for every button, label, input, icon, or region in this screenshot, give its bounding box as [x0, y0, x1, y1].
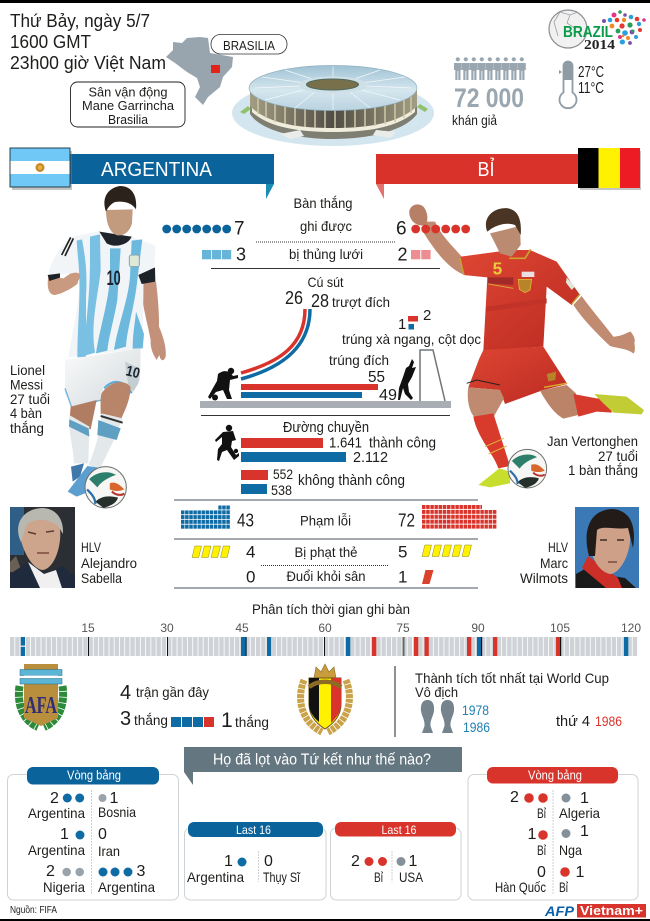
- shots chart: 55: [368, 369, 385, 386]
- shots chart: 1: [398, 316, 406, 333]
- cards rows: 1: [398, 568, 407, 586]
- passes chart: 552: [273, 467, 293, 482]
- goal timing timeline: 60: [318, 621, 332, 635]
- panel: Belgium group stage: 0: [537, 864, 546, 881]
- panel: Belgium group stage: 1: [580, 823, 589, 840]
- goals scored and conceded: ghi được: [300, 219, 352, 234]
- panel: Belgium group stage: 1: [528, 826, 536, 843]
- panel: Argentina group stage: Argentina: [98, 879, 155, 895]
- panel: Argentina group stage: 1: [60, 826, 69, 843]
- stadium name box: Sân vận động: [88, 84, 168, 100]
- goal timing timeline: [10, 601, 641, 656]
- Vertonghen caption: 27 tuổi: [598, 448, 638, 464]
- panel: Argentina group stage: 1: [110, 790, 118, 807]
- cards rows: 0: [246, 568, 255, 586]
- crest: Argentine Football Association: [19, 664, 63, 727]
- goals scored and conceded: 7: [234, 218, 245, 240]
- stadium illustration: [232, 66, 434, 146]
- panel: Belgium group stage: 2: [510, 789, 519, 806]
- flag of Belgium: [578, 148, 641, 190]
- recent matches: thắng: [235, 714, 269, 730]
- Vertonghen caption: Jan Vertonghen: [547, 433, 638, 449]
- panel: Argentina last 16: Last 16: [236, 823, 271, 837]
- recent matches: [120, 682, 269, 732]
- player photo: Lionel Messi: 10: [107, 266, 121, 290]
- panel: Belgium group stage: 1: [580, 790, 589, 807]
- source note: Nguồn: FIFA: [10, 904, 57, 916]
- panel: Belgium group stage: Bỉ: [559, 879, 569, 895]
- Vertonghen caption: [547, 433, 638, 478]
- shots chart: 26: [285, 288, 303, 308]
- icon: passing player silhouette: [215, 425, 239, 461]
- coach photo: Marc Wilmots: [575, 507, 639, 588]
- Sabella caption: Sabella: [81, 570, 122, 586]
- crest: Royal Belgian Football Association: [301, 664, 349, 732]
- goal timing timeline: 105: [550, 621, 570, 635]
- match date and time: Thứ Bảy, ngày 5/7: [10, 11, 150, 31]
- panel: Belgium last 16: Last 16: [382, 823, 417, 837]
- Belgium banner: [376, 154, 580, 199]
- panel: Argentina last 16: Thụy Sĩ: [263, 869, 301, 885]
- stadium name box: Brasilia: [108, 112, 149, 127]
- Argentina banner: [70, 154, 274, 199]
- fouls row: 43: [237, 510, 254, 530]
- Messi caption: [10, 362, 50, 436]
- best World Cup results: 1986: [595, 714, 622, 729]
- spectators: 72 000: [452, 57, 526, 128]
- best World Cup results: 1978: [462, 703, 489, 718]
- Brazil 2014 logo: BRAZIL: [563, 24, 613, 41]
- shots chart: [200, 274, 481, 416]
- Brazil 2014 logo: [549, 10, 646, 52]
- passes chart: không thành công: [298, 473, 405, 489]
- player photo: Jan Vertonghen: 5: [493, 259, 503, 279]
- panel: Belgium last 16: 1: [408, 853, 418, 870]
- panel: Belgium group stage: Nga: [559, 842, 582, 858]
- section heading banner: Họ đã lọt vào Tứ kết như thế nào?: [213, 752, 431, 768]
- passes chart: thành công: [369, 434, 436, 452]
- panel: Argentina last 16: Argentina: [187, 869, 244, 885]
- panel: Argentina last 16: 1: [224, 853, 233, 870]
- AFP logo: AFP: [544, 904, 575, 919]
- panel: Argentina group stage: 3: [136, 863, 146, 880]
- Vietnam+ logo: Vietnam+: [580, 903, 643, 918]
- section heading banner: [184, 747, 462, 785]
- goal timing timeline: 120: [621, 621, 641, 635]
- coach photo: Alejandro Sabella: [10, 507, 75, 588]
- recent matches: thắng: [134, 712, 168, 728]
- goals scored and conceded: [162, 196, 470, 268]
- flag of Argentina: [10, 148, 72, 190]
- cards rows: 4: [246, 542, 255, 562]
- passes chart: 538: [271, 483, 292, 498]
- goal timing timeline: 15: [81, 621, 95, 635]
- panel: Argentina group stage: Vòng bảng: [67, 768, 121, 782]
- panel: Belgium last 16: 2: [351, 853, 360, 870]
- player photo: Lionel Messi: 10: [124, 363, 141, 382]
- panel: Belgium group stage: Bỉ: [537, 805, 547, 821]
- cards rows: Đuổi khỏi sân: [286, 568, 366, 584]
- thermometer and temperatures: 27°C: [578, 64, 604, 81]
- passes chart: 2.112: [353, 449, 388, 466]
- Argentina banner: ARGENTINA: [101, 158, 212, 181]
- Messi caption: 27 tuổi: [10, 391, 50, 407]
- panel: Argentina group stage: Iran: [98, 843, 120, 859]
- Belgium banner: BỈ: [478, 158, 495, 181]
- shots chart: 28: [311, 291, 329, 311]
- Messi caption: thắng: [10, 420, 44, 436]
- shots chart: trúng đích: [329, 352, 389, 368]
- fouls row: [174, 500, 497, 539]
- goal timing timeline: 90: [471, 621, 485, 635]
- panel: Argentina group stage: [8, 767, 178, 900]
- Wilmots caption: HLV: [548, 539, 568, 555]
- icon: kicker silhouette: [208, 368, 238, 400]
- panel: Belgium group stage: Bỉ: [537, 842, 547, 858]
- stadium name box: Mane Garrincha: [82, 98, 175, 113]
- icon: goalkeeper silhouette: [398, 359, 416, 400]
- goal timing timeline: Phân tích thời gian ghi bàn: [252, 601, 410, 617]
- goals scored and conceded: bị thủng lưới: [289, 246, 363, 262]
- Sabella caption: HLV: [81, 539, 101, 555]
- goal timing timeline: 75: [396, 621, 410, 635]
- match date and time: 1600 GMT: [10, 32, 91, 52]
- recent matches: 4: [120, 682, 131, 704]
- panel: Belgium last 16: [330, 822, 461, 900]
- best World Cup results: thứ 4: [556, 713, 590, 730]
- cards rows: [174, 542, 478, 588]
- cards rows: 5: [398, 542, 407, 562]
- goals scored and conceded: 6: [396, 218, 407, 240]
- panel: Belgium last 16: USA: [399, 869, 424, 885]
- Wilmots caption: [520, 539, 568, 586]
- goal timing timeline: 30: [160, 621, 174, 635]
- thermometer and temperatures: 11°C: [578, 80, 604, 97]
- Wilmots caption: Wilmots: [520, 570, 568, 586]
- panel: Argentina last 16: 0: [264, 853, 273, 870]
- shots chart: trúng xà ngang, cột dọc: [342, 331, 481, 347]
- goal timing timeline: 45: [235, 621, 249, 635]
- Brazil 2014 logo: 2014: [584, 37, 615, 52]
- match date and time: [10, 11, 166, 73]
- player photo: Jan Vertonghen: [409, 204, 644, 488]
- spectators: 72 000: 72 000: [454, 83, 524, 113]
- fouls row: 72: [398, 510, 415, 530]
- panel: Belgium group stage: [468, 767, 638, 900]
- goals scored and conceded: 2: [398, 244, 408, 264]
- map of Brazil with Brasilia marker: [166, 34, 287, 105]
- passes chart: Đường chuyền: [283, 420, 369, 436]
- best World Cup results: 1986: [463, 720, 490, 735]
- panel: Argentina group stage: 2: [46, 863, 55, 880]
- map of Brazil with Brasilia marker: BRASILIA: [223, 38, 275, 53]
- panel: Belgium group stage: Vòng bảng: [528, 768, 582, 782]
- shots chart: 2: [423, 307, 431, 324]
- best World Cup results: [395, 666, 622, 737]
- panel: Argentina group stage: Argentina: [28, 805, 85, 821]
- passes chart: [241, 420, 436, 498]
- Messi caption: 4 bàn: [10, 405, 42, 421]
- crest: Argentine Football Association: AFA: [25, 693, 57, 719]
- panel: Belgium group stage: Hàn Quốc: [495, 879, 546, 895]
- top black rule: [0, 0, 650, 3]
- goals scored and conceded: Bàn thắng: [294, 196, 352, 211]
- best World Cup results: Thành tích tốt nhất tại World Cup: [415, 670, 609, 686]
- cards rows: Bị phạt thẻ: [294, 544, 358, 560]
- best World Cup results: Vô địch: [415, 684, 458, 700]
- Vertonghen caption: 1 bàn thắng: [568, 462, 638, 478]
- panel: Argentina last 16: [184, 822, 326, 900]
- panel: Argentina group stage: 0: [98, 826, 107, 843]
- shots chart: trượt đích: [332, 294, 390, 310]
- Wilmots caption: Marc: [540, 555, 568, 571]
- panel: Argentina group stage: Nigeria: [43, 879, 85, 895]
- panel: Argentina group stage: Bosnia: [98, 804, 136, 820]
- Messi caption: Messi: [10, 376, 43, 392]
- Sabella caption: Alejandro: [81, 555, 137, 571]
- match date and time: 23h00 giờ Việt Nam: [10, 53, 166, 73]
- thermometer and temperatures: [559, 62, 604, 108]
- shots chart: Cú sút: [308, 274, 344, 290]
- panel: Belgium last 16: Bỉ: [374, 869, 384, 885]
- shots chart: 49: [379, 387, 397, 404]
- panel: Argentina group stage: 2: [50, 790, 59, 807]
- recent matches: 1: [221, 709, 233, 732]
- panel: Argentina group stage: Argentina: [28, 842, 85, 858]
- passes chart: 1.641: [329, 434, 362, 452]
- recent matches: trận gần đây: [136, 684, 209, 700]
- player photo: Lionel Messi: [48, 186, 166, 508]
- recent matches: 3: [120, 708, 131, 730]
- panel: Belgium group stage: Algeria: [559, 805, 600, 821]
- bottom black rule: [0, 919, 650, 921]
- spectators: 72 000: khán giả: [452, 112, 497, 128]
- Sabella caption: [81, 539, 137, 586]
- Messi caption: Lionel: [10, 362, 45, 378]
- panel: Belgium group stage: 1: [576, 864, 584, 881]
- stadium name box: [70, 82, 185, 127]
- goals scored and conceded: 3: [236, 244, 246, 264]
- fouls row: Phạm lỗi: [300, 512, 351, 528]
